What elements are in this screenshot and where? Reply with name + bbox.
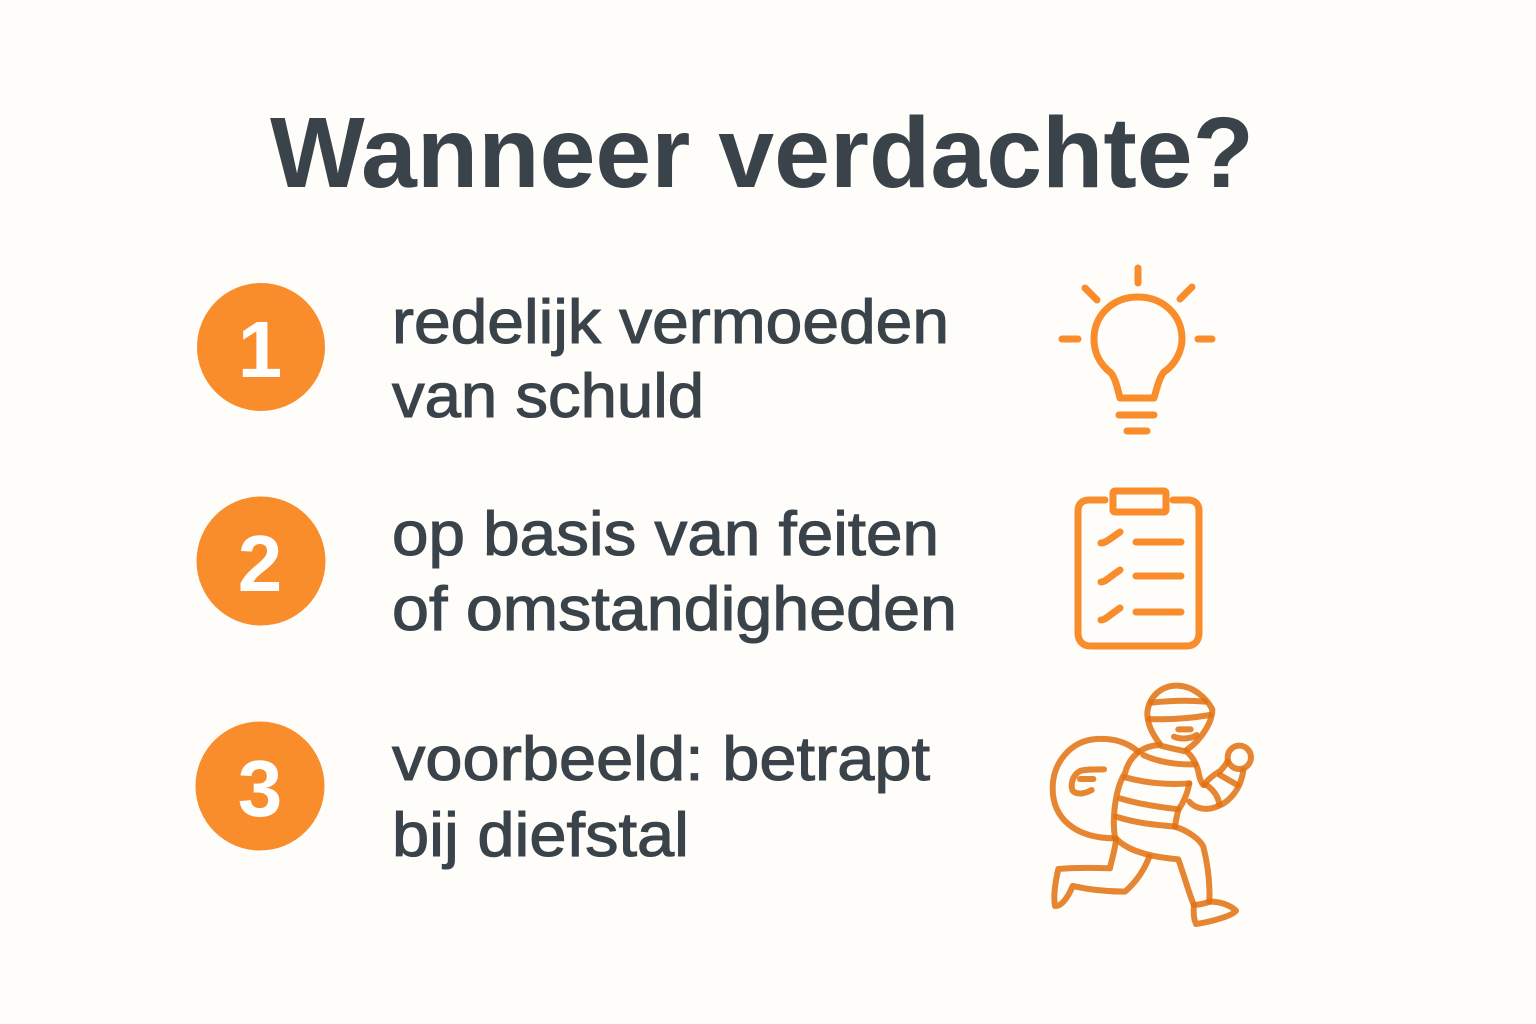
item 3: text: voorbeeld: betrapt	[392, 725, 930, 794]
item 2: text: op basis van feiten	[392, 500, 939, 569]
thief: arm and hand	[1189, 746, 1251, 809]
item 3: text	[392, 725, 930, 870]
item 1: number badge	[197, 283, 325, 411]
item 3: text: bij diefstal	[392, 801, 689, 870]
item 3: number badge: 3	[238, 744, 282, 833]
item 3: number badge	[196, 722, 324, 850]
thief: head	[1147, 686, 1212, 750]
item 1: text	[392, 288, 949, 431]
item 1: text: van schuld	[392, 362, 704, 431]
title: Wanneer verdachte?	[270, 97, 1254, 209]
thief: legs	[1054, 827, 1236, 924]
item 1: text: redelijk vermoeden	[392, 288, 949, 357]
icon: clipboard checklist	[1078, 491, 1199, 646]
item 2: number badge	[196, 496, 326, 626]
icon: thief with euro bag	[1053, 686, 1251, 924]
item 1: number badge: 1	[238, 305, 282, 394]
thief: body and stripes	[1114, 745, 1204, 838]
item 2: number badge: 2	[238, 519, 282, 608]
icon: light bulb	[1062, 268, 1212, 431]
item 2: text	[392, 500, 957, 644]
item 2: text: of omstandigheden	[392, 575, 957, 644]
thief: money bag	[1053, 739, 1138, 838]
